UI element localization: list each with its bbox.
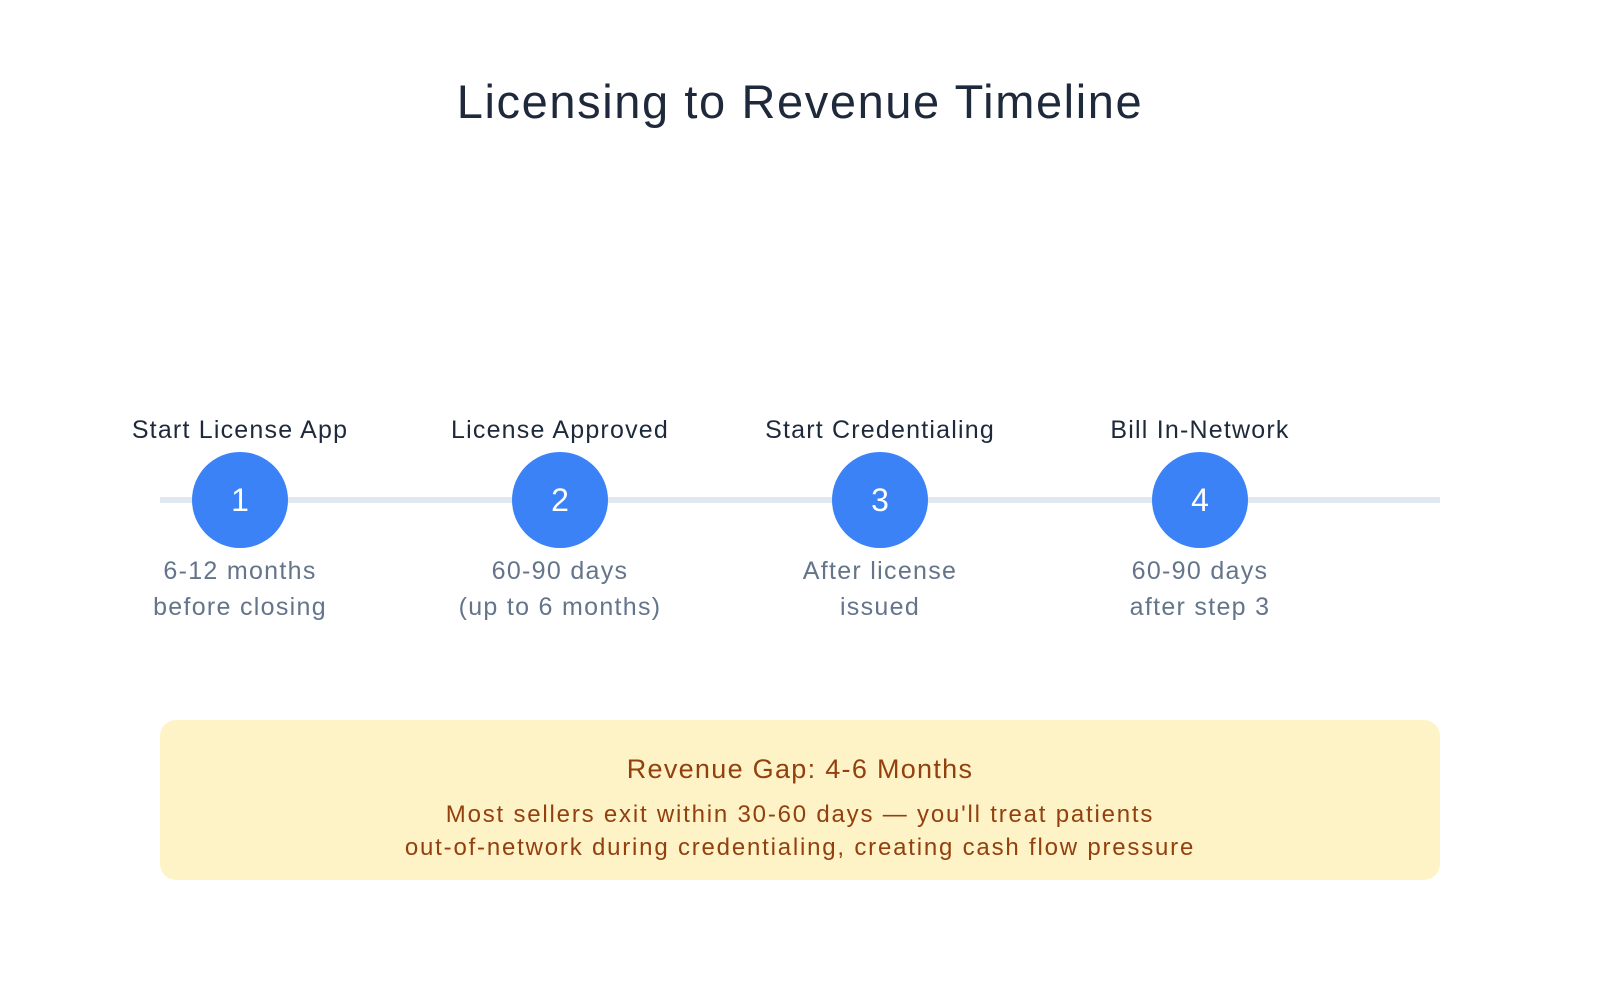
step 1 circle: 1 [231,482,249,518]
step 2 duration: 60-90 days [492,557,628,585]
callout body: Most sellers exit within 30-60 days — you'll treat patients [446,801,1154,828]
step 1 duration: before closing [153,593,327,621]
step 2 duration [459,557,661,621]
step 4 label: Bill In-Network [1110,416,1290,444]
step 1 circle [192,452,288,548]
step 4 circle: 4 [1191,482,1209,518]
step 3 duration: issued [840,593,920,621]
step 2 circle [512,452,608,548]
step 3 circle: 3 [871,482,889,518]
step 1 duration: 6-12 months [163,557,317,585]
step 3 circle [832,452,928,548]
step 4 duration: after step 3 [1130,593,1270,621]
callout body: out-of-network during credentialing, creating cash flow pressure [405,834,1195,861]
step 2 duration: (up to 6 months) [459,593,661,621]
step 2 label: License Approved [451,416,669,444]
callout heading: Revenue Gap: 4-6 Months [627,754,973,784]
step 1 duration [153,557,327,621]
step 2 circle: 2 [551,482,569,518]
step 4 circle [1152,452,1248,548]
timeline line [160,497,1440,503]
title: Licensing to Revenue Timeline [457,75,1143,128]
step 3 label: Start Credentialing [765,416,995,444]
step 3 duration: After license [803,557,957,585]
step 1 label: Start License App [132,416,348,444]
step 4 duration: 60-90 days [1132,557,1268,585]
callout body [405,801,1195,861]
step 4 duration [1130,557,1270,621]
callout: revenue gap [160,720,1440,880]
step 3 duration [802,557,957,621]
